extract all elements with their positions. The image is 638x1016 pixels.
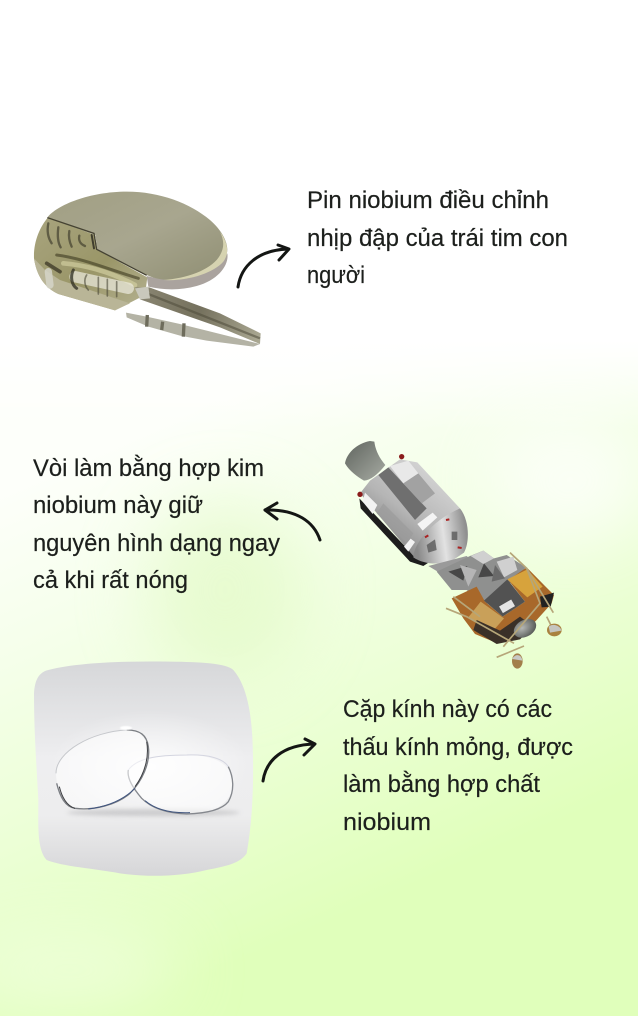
docking tunnel bbox=[428, 556, 475, 574]
lens glint bbox=[120, 726, 132, 730]
pacemaker lead upper bbox=[135, 287, 261, 344]
lens table shadow bbox=[67, 809, 240, 816]
pacemaker plate highlight bbox=[163, 232, 227, 280]
text: nozzle caption: nguyên hình dạng ngay bbox=[33, 530, 280, 557]
lens card glow bbox=[50, 710, 250, 823]
icon: spacecraft bbox=[345, 441, 562, 669]
lens left bbox=[56, 730, 149, 809]
panel: lenses photo bbox=[34, 661, 253, 876]
text: nozzle caption: Vòi làm bằng hợp kim bbox=[33, 455, 264, 482]
text: nozzle caption: niobium này giữ bbox=[33, 492, 203, 519]
lunar module legs bbox=[446, 553, 553, 657]
lunar module gold descent stage bbox=[452, 567, 554, 642]
text: pacemaker caption: Pin niobium điều chỉnh bbox=[307, 187, 549, 214]
text: pacemaker caption bbox=[307, 187, 568, 289]
lunar module ascent stage bbox=[437, 551, 526, 605]
red thrusters bbox=[357, 454, 404, 497]
command module cone bbox=[413, 508, 468, 564]
text: lenses caption: thấu kính mỏng, được bbox=[343, 734, 573, 761]
lens right bbox=[128, 755, 233, 814]
service module bbox=[360, 459, 460, 556]
arrow: pacemaker to text bbox=[238, 245, 289, 287]
arrow: spacecraft to text bbox=[265, 503, 320, 540]
pacemaker case rim bbox=[147, 253, 228, 289]
pacemaker header block bbox=[34, 217, 147, 310]
lens card background bbox=[34, 661, 253, 876]
pacemaker lead lower bbox=[126, 313, 260, 347]
lunar module gold foil bbox=[507, 569, 543, 597]
arrow: lenses to text bbox=[263, 739, 315, 781]
text: lenses caption: niobium bbox=[343, 809, 431, 836]
lunar module panel bbox=[484, 579, 525, 617]
text: lenses caption bbox=[343, 696, 573, 836]
text: lenses caption: làm bằng hợp chất bbox=[343, 771, 540, 798]
lunar module footpads bbox=[512, 624, 562, 669]
pacemaker top plate bbox=[47, 192, 227, 280]
text: lenses caption: Cặp kính này có các bbox=[343, 696, 552, 723]
spacecraft nozzle bbox=[345, 441, 385, 481]
icon: pacemaker photo bbox=[34, 192, 261, 347]
service module panels bbox=[363, 461, 437, 552]
text: pacemaker caption: người bbox=[307, 262, 365, 289]
text: nozzle caption bbox=[33, 455, 280, 594]
service module dark underside bbox=[359, 498, 430, 566]
text: nozzle caption: cả khi rất nóng bbox=[33, 567, 188, 594]
lunar module engine bbox=[510, 615, 540, 642]
text: pacemaker caption: nhịp đập của trái tim con bbox=[307, 225, 568, 252]
pacemaker circuitry details bbox=[47, 223, 138, 297]
